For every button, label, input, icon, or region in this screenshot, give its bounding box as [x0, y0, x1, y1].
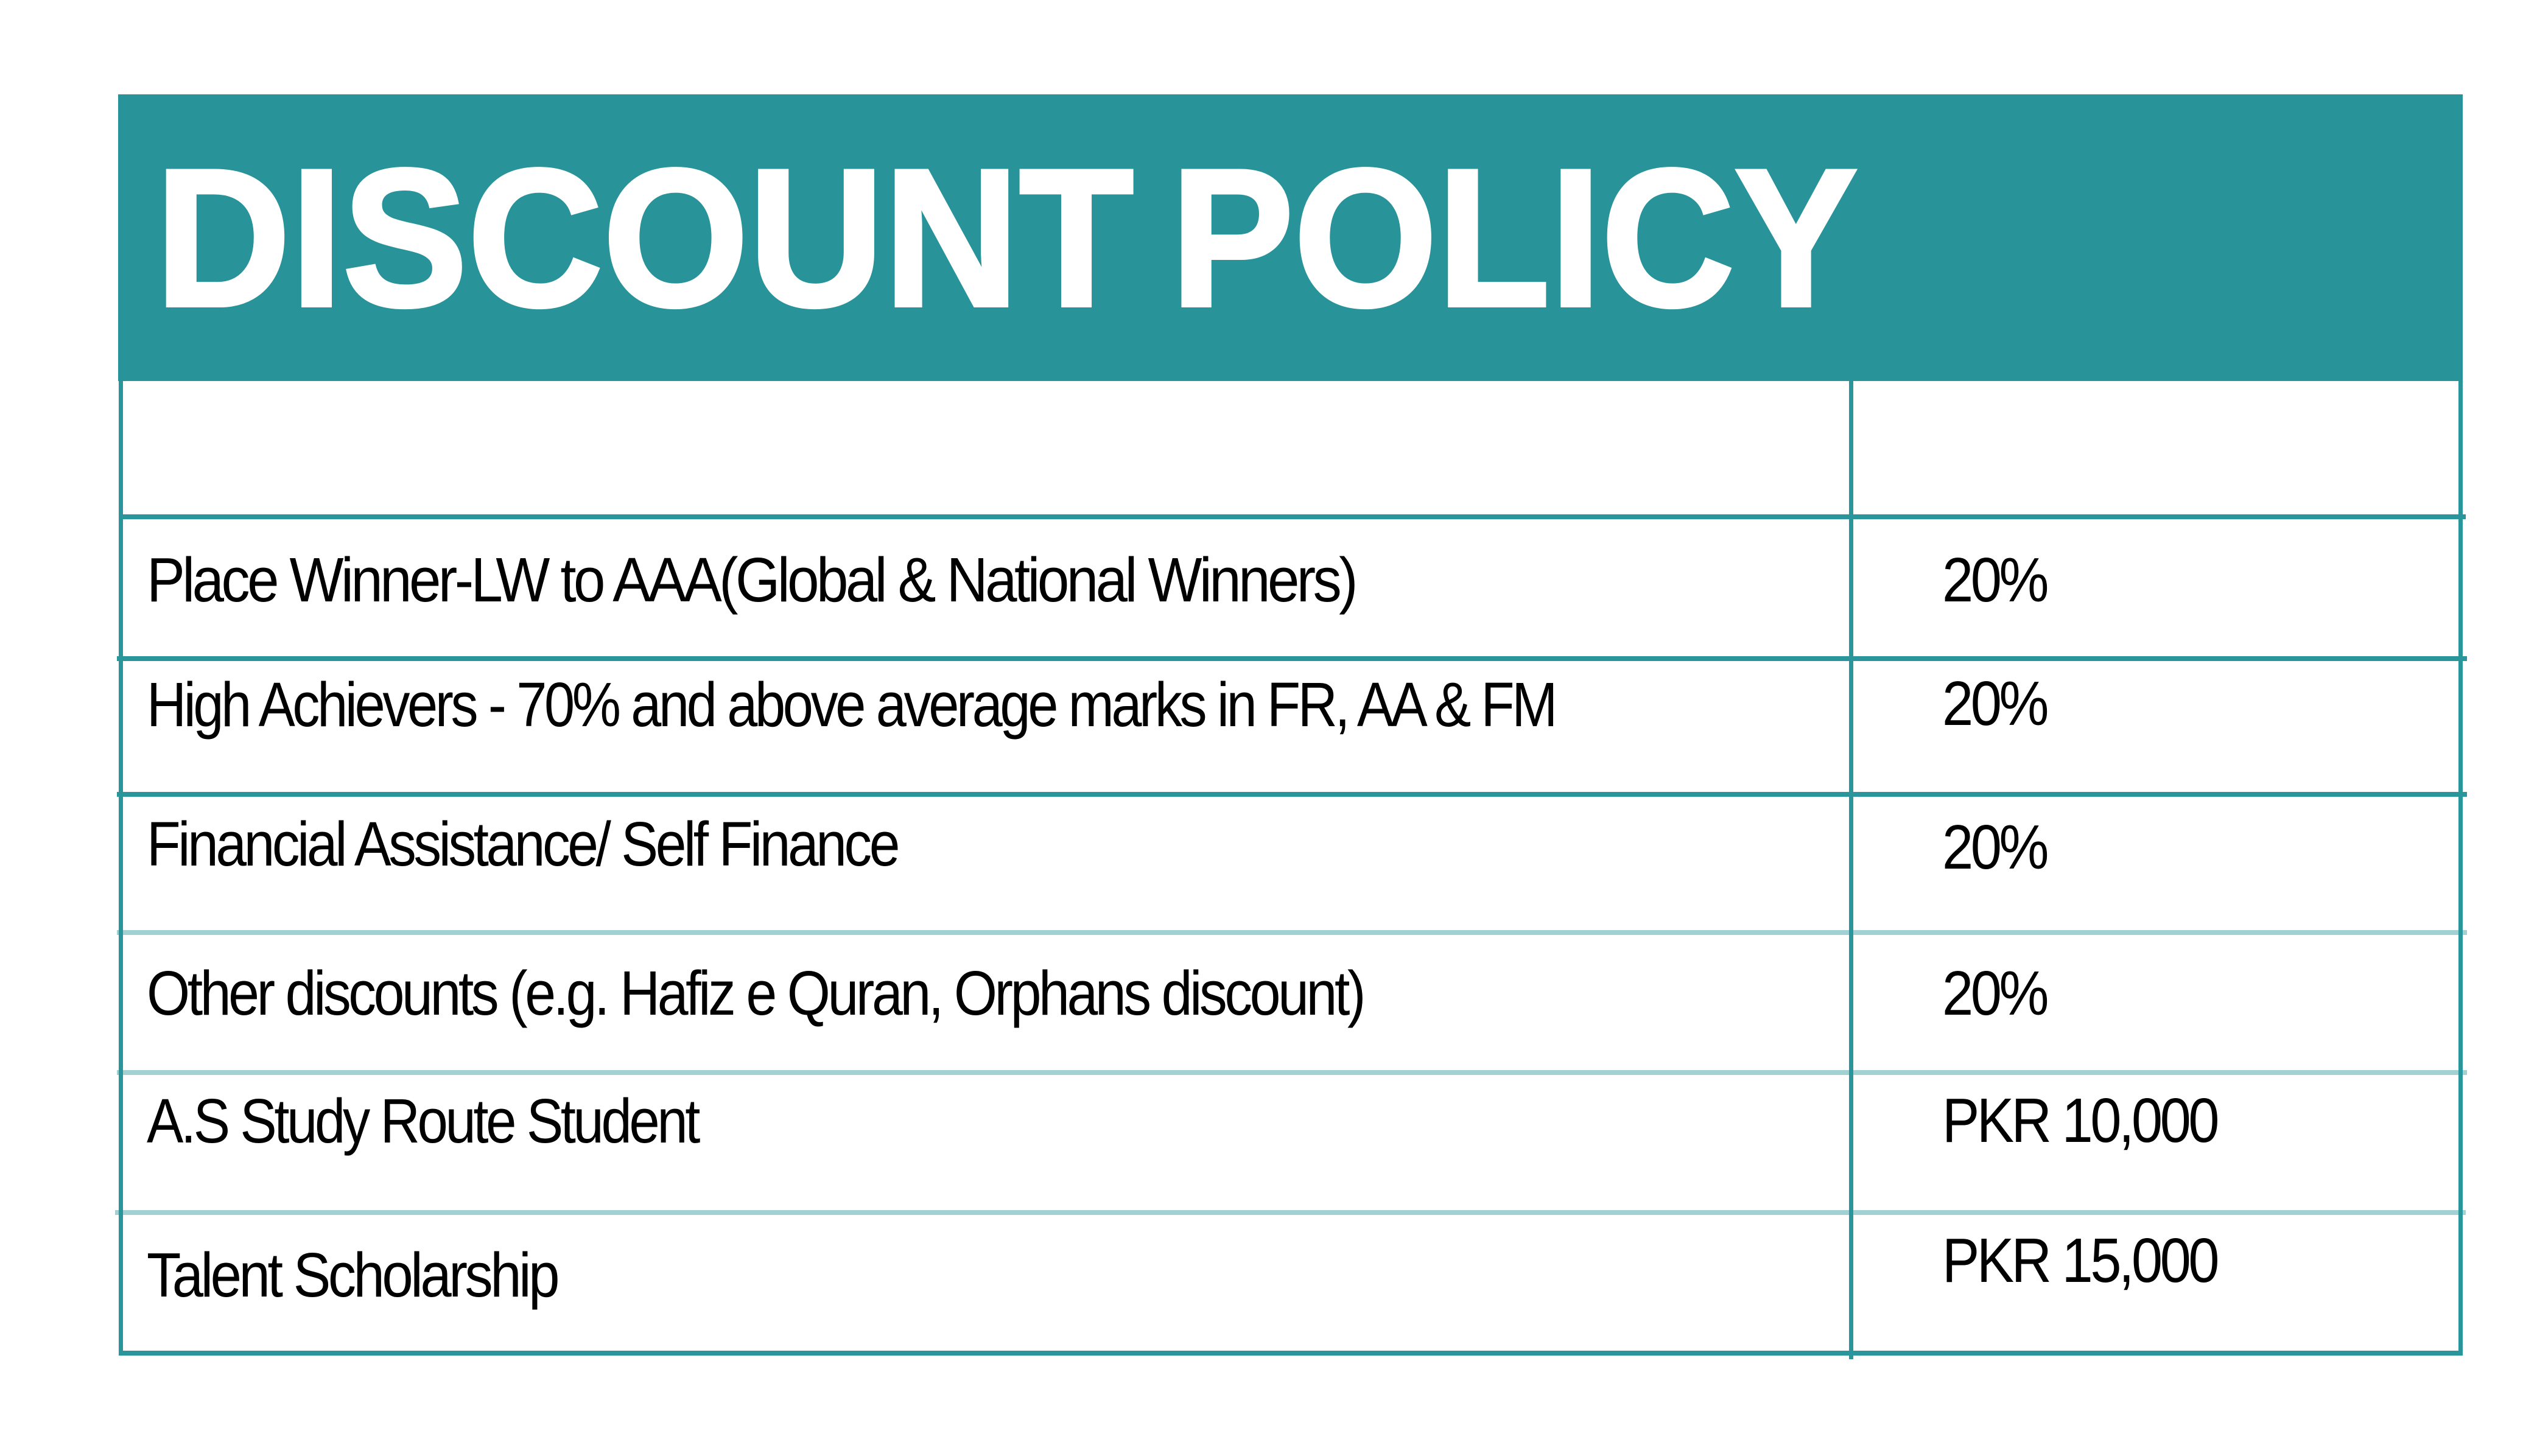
row value: PKR 15,000 — [1942, 1225, 2218, 1295]
table grid — [115, 381, 2467, 1359]
title: POLICY — [1171, 129, 1858, 348]
header banner — [118, 94, 2463, 381]
row: talent scholarship — [147, 1225, 2218, 1310]
row value: 20% — [1942, 668, 2047, 738]
row label: High Achievers - 70% and above average marks in FR, AA & FM — [147, 670, 1555, 740]
row label: Other discounts (e.g. Hafiz e Quran, Orphans discount) — [147, 958, 1363, 1028]
row: place winner — [147, 545, 2047, 615]
row label: Talent Scholarship — [147, 1240, 558, 1310]
row value: 20% — [1942, 545, 2047, 615]
row value: 20% — [1942, 812, 2047, 882]
row: high achievers — [147, 668, 2047, 740]
row: financial assistance — [147, 809, 2047, 882]
row label: Place Winner-LW to AAA(Global & National Winners) — [147, 545, 1355, 615]
row value: PKR 10,000 — [1942, 1085, 2218, 1155]
row: other discounts — [147, 958, 2047, 1028]
row label: A.S Study Route Student — [147, 1086, 700, 1156]
row value: 20% — [1942, 958, 2047, 1028]
row: a.s study route student — [147, 1085, 2218, 1156]
title: DISCOUNT — [155, 129, 1134, 348]
row label: Financial Assistance/ Self Finance — [147, 809, 898, 879]
table rows — [147, 545, 2218, 1310]
